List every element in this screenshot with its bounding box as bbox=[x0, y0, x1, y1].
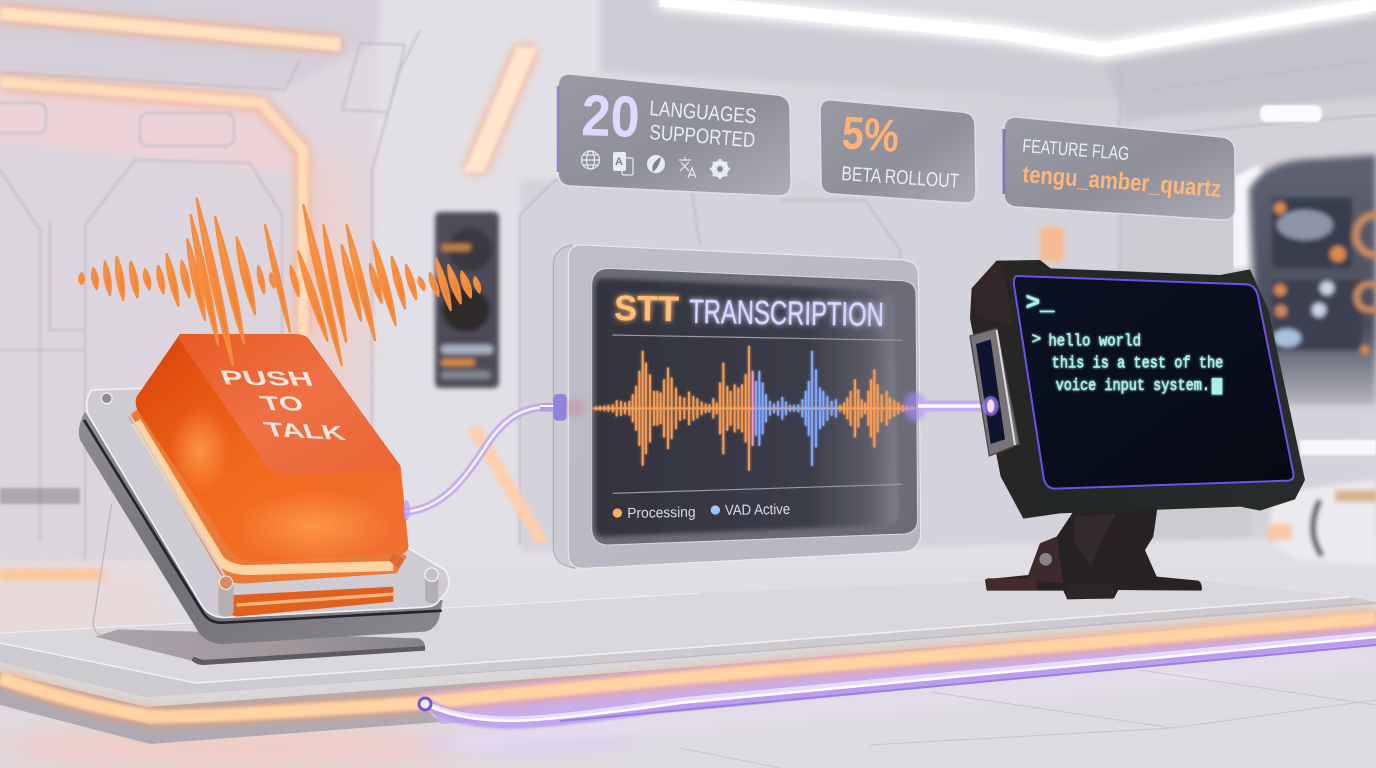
platform top bbox=[0, 575, 1376, 698]
wall panel seams bbox=[0, 30, 1376, 570]
right bottom white cylinder bbox=[1268, 480, 1376, 565]
stat card: 5% beta rollout: 5% bbox=[840, 106, 901, 162]
neon strip: lower diagonal bbox=[466, 428, 549, 543]
orange light well bbox=[128, 390, 407, 584]
button label: PUSH bbox=[217, 367, 317, 391]
ceiling light: white strip bbox=[660, 0, 1376, 50]
glass side edge bbox=[553, 245, 575, 568]
wall mounted control panel bbox=[435, 212, 499, 388]
clear support bracket bbox=[93, 503, 112, 636]
floor tile seams bbox=[680, 670, 1376, 768]
transcription waveform bbox=[593, 347, 917, 470]
rear floor bbox=[0, 535, 1376, 650]
panel: STT transcription bbox=[540, 245, 926, 568]
terminal text: hello world bbox=[1048, 333, 1141, 352]
wall lamp bbox=[1040, 227, 1064, 262]
legend: VAD active: VAD Active bbox=[725, 502, 790, 519]
screen bbox=[1014, 276, 1293, 489]
stat card: 20 languages supported: SUPPORTED bbox=[649, 121, 756, 152]
stat card: feature flag: tengu_amber_quartz bbox=[1022, 161, 1222, 203]
side port bbox=[970, 328, 1019, 456]
front floor bbox=[0, 640, 1376, 768]
stat card: 20 languages supported: 20 bbox=[581, 83, 641, 150]
right wall display bbox=[1240, 155, 1376, 455]
floor and platform bbox=[0, 480, 1376, 768]
terminal device bbox=[970, 260, 1305, 599]
connector tube to terminal bbox=[918, 400, 992, 412]
dark inner screen bbox=[595, 278, 898, 537]
stat card: feature flag bbox=[1004, 117, 1235, 220]
shell bbox=[970, 260, 1305, 519]
glow at tube exit bbox=[403, 500, 410, 520]
icon: globe bbox=[582, 151, 600, 169]
purple port end bbox=[983, 396, 999, 416]
neon strip: door frame bbox=[0, 82, 303, 335]
ceiling light: small bbox=[1260, 105, 1322, 122]
icon: translate A bbox=[613, 152, 633, 175]
button keycap body bbox=[136, 334, 408, 562]
glass plate bbox=[86, 388, 449, 617]
push to talk button assembly bbox=[79, 334, 449, 665]
right tube glow bbox=[904, 392, 926, 421]
terminal text bbox=[1026, 290, 1223, 396]
dark vent bbox=[0, 488, 80, 504]
pink glow wash near door bbox=[300, 140, 360, 520]
icon: translate A: A bbox=[615, 156, 623, 168]
stat card: 5% beta rollout: BETA ROLLOUT bbox=[841, 163, 960, 193]
purple floor cable bbox=[419, 634, 1376, 723]
platform base front bbox=[0, 684, 440, 744]
button label bbox=[217, 367, 348, 445]
icon: disc globe bbox=[647, 155, 665, 173]
left tube connector bbox=[540, 394, 587, 421]
inner screen frame bbox=[592, 268, 918, 545]
terminal text: > bbox=[1032, 330, 1041, 348]
glass screws bbox=[101, 393, 438, 617]
terminal text: this is a test of the bbox=[1052, 355, 1223, 374]
purple tube from button to STT panel bbox=[405, 407, 556, 512]
neon strip: column diagonal bbox=[464, 47, 537, 172]
stand bbox=[985, 508, 1202, 599]
neon strip: upper ceiling bbox=[0, 7, 340, 51]
terminal text: >_ bbox=[1026, 290, 1055, 317]
amber neon edge bbox=[0, 618, 1376, 716]
stand foot bbox=[95, 629, 425, 665]
metal base bbox=[79, 412, 443, 644]
divider lines bbox=[613, 335, 903, 493]
purple band bbox=[420, 612, 1376, 724]
stat card: 5% beta rollout bbox=[820, 100, 976, 203]
screen heading bbox=[614, 289, 884, 334]
button label: TO bbox=[257, 393, 307, 416]
button label: TALK bbox=[261, 418, 348, 445]
orange sound wave above button bbox=[79, 198, 480, 365]
legend: processing: Processing bbox=[627, 505, 696, 522]
stat card: 20 languages supported: LANGUAGES bbox=[649, 97, 757, 128]
icon: text translate bbox=[679, 157, 696, 178]
terminal text: voice input system. bbox=[1056, 377, 1210, 396]
glass outer plate bbox=[568, 245, 921, 568]
platform lip bbox=[0, 602, 1376, 724]
screen heading: STT bbox=[614, 289, 680, 329]
screen heading: TRANSCRIPTION bbox=[689, 294, 884, 334]
stat card: feature flag: FEATURE FLAG bbox=[1022, 136, 1130, 165]
button keycap top face bbox=[178, 334, 400, 476]
stat card: 20 languages supported bbox=[558, 74, 791, 196]
icon: gear bbox=[710, 159, 730, 179]
